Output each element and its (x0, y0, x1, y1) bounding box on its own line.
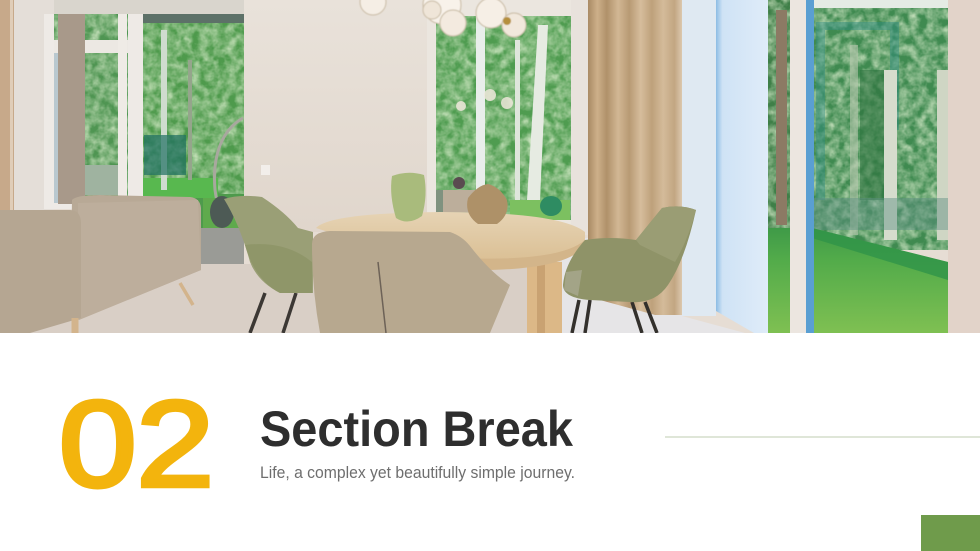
floor (31, 264, 527, 333)
section number: 02 (59, 376, 214, 512)
white wall (244, 0, 427, 232)
green vase (391, 173, 426, 222)
left curtain (0, 0, 14, 210)
light switch (261, 165, 270, 175)
round dining table (316, 212, 585, 333)
subtitle: Life, a complex yet beautifully simple journey. (260, 463, 575, 482)
left green chair (224, 196, 313, 333)
section heading: Section Break (260, 401, 573, 457)
brown artichoke vase (467, 184, 508, 224)
front beige chair (312, 231, 510, 333)
photo: dining room interior (0, 0, 980, 333)
tall beige curtain (588, 0, 682, 315)
pendant lamp globes (360, 0, 526, 37)
right green chair (563, 206, 696, 333)
blue-white wall beside glazing (682, 0, 716, 316)
central window with forest view (143, 14, 244, 264)
green corner block (921, 515, 980, 551)
tall glass door, right pane with trees and lawn (812, 0, 949, 333)
sofa (0, 195, 201, 333)
tall glass door, left pane (716, 0, 792, 333)
ceiling band and left window frame (44, 0, 244, 209)
white door post (790, 0, 814, 333)
right wall pillar (948, 0, 980, 333)
left window with trees (54, 14, 128, 204)
right window with birch trees (427, 0, 571, 224)
